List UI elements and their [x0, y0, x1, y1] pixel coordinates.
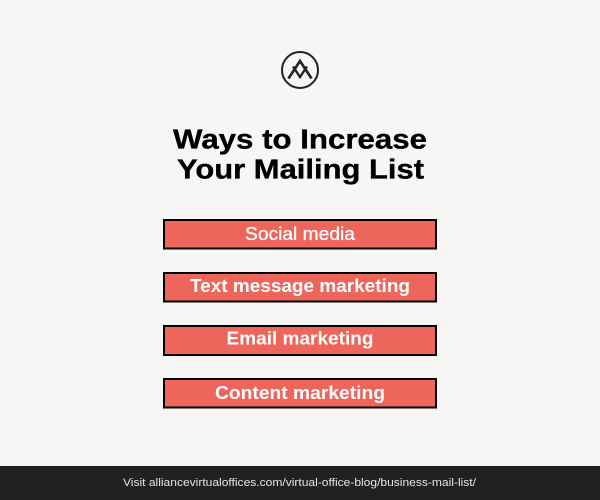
title: Ways to Increase — [173, 124, 427, 154]
item: email marketing — [164, 326, 436, 355]
item: content marketing: Content marketing — [215, 383, 385, 403]
footer bar: Visit alliancevirtualoffices.com/virtual-office-blog/business-mail-list/ — [123, 477, 477, 489]
item: social media: Social media — [245, 224, 356, 244]
item: social media — [164, 220, 436, 248]
item: text message marketing: Text message marketing — [190, 276, 410, 296]
item: text message marketing — [164, 273, 436, 302]
item: email marketing: Email marketing — [226, 328, 374, 348]
footer bar — [0, 466, 600, 500]
icon: logo — [282, 52, 318, 88]
title — [173, 124, 427, 184]
title: Your Mailing List — [177, 154, 424, 184]
item: content marketing — [164, 379, 436, 408]
